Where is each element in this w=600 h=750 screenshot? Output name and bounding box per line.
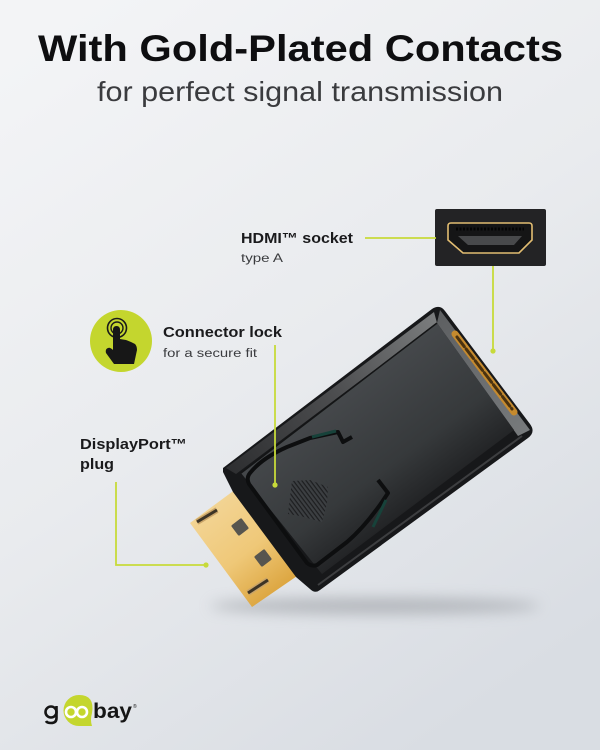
shadow under adapter — [210, 598, 540, 614]
adapter body — [223, 307, 533, 592]
icon: HDMI socket close-up — [435, 209, 546, 266]
lower bevel highlight — [318, 436, 522, 585]
lock panel outline — [248, 432, 388, 566]
logo: goobay: bay — [93, 700, 132, 723]
subtitle: for perfect signal transmission — [97, 76, 503, 107]
DisplayPort label: DisplayPort™ — [80, 437, 187, 453]
bevel: top edge — [226, 312, 437, 474]
callout line: HDMI socket horizontal — [365, 237, 436, 239]
gold DisplayPort plug — [190, 489, 300, 607]
HDMI label — [241, 231, 353, 265]
title: With Gold-Plated Contacts — [38, 28, 563, 69]
lock grip texture — [288, 480, 328, 522]
logo: goobay: ® — [133, 703, 137, 710]
DisplayPort label — [80, 437, 187, 473]
callout line: connector lock — [272, 345, 278, 488]
connector lock label: Connector lock — [163, 325, 283, 341]
top face — [241, 323, 514, 574]
bevel: right edge — [437, 310, 530, 436]
lock panel green highlights — [312, 431, 386, 527]
HDMI label: type A — [241, 253, 283, 265]
icon: touch hand on green circle — [90, 310, 152, 372]
callout line: HDMI socket vertical — [490, 266, 496, 354]
callout line: DisplayPort plug — [116, 482, 209, 568]
connector lock label: for a secure fit — [163, 348, 258, 360]
connector lock label — [163, 325, 283, 360]
gold HDMI opening — [455, 334, 514, 412]
HDMI label: HDMI™ socket — [241, 231, 353, 247]
DisplayPort label: plug — [80, 457, 114, 473]
logo: goobay — [46, 695, 137, 726]
